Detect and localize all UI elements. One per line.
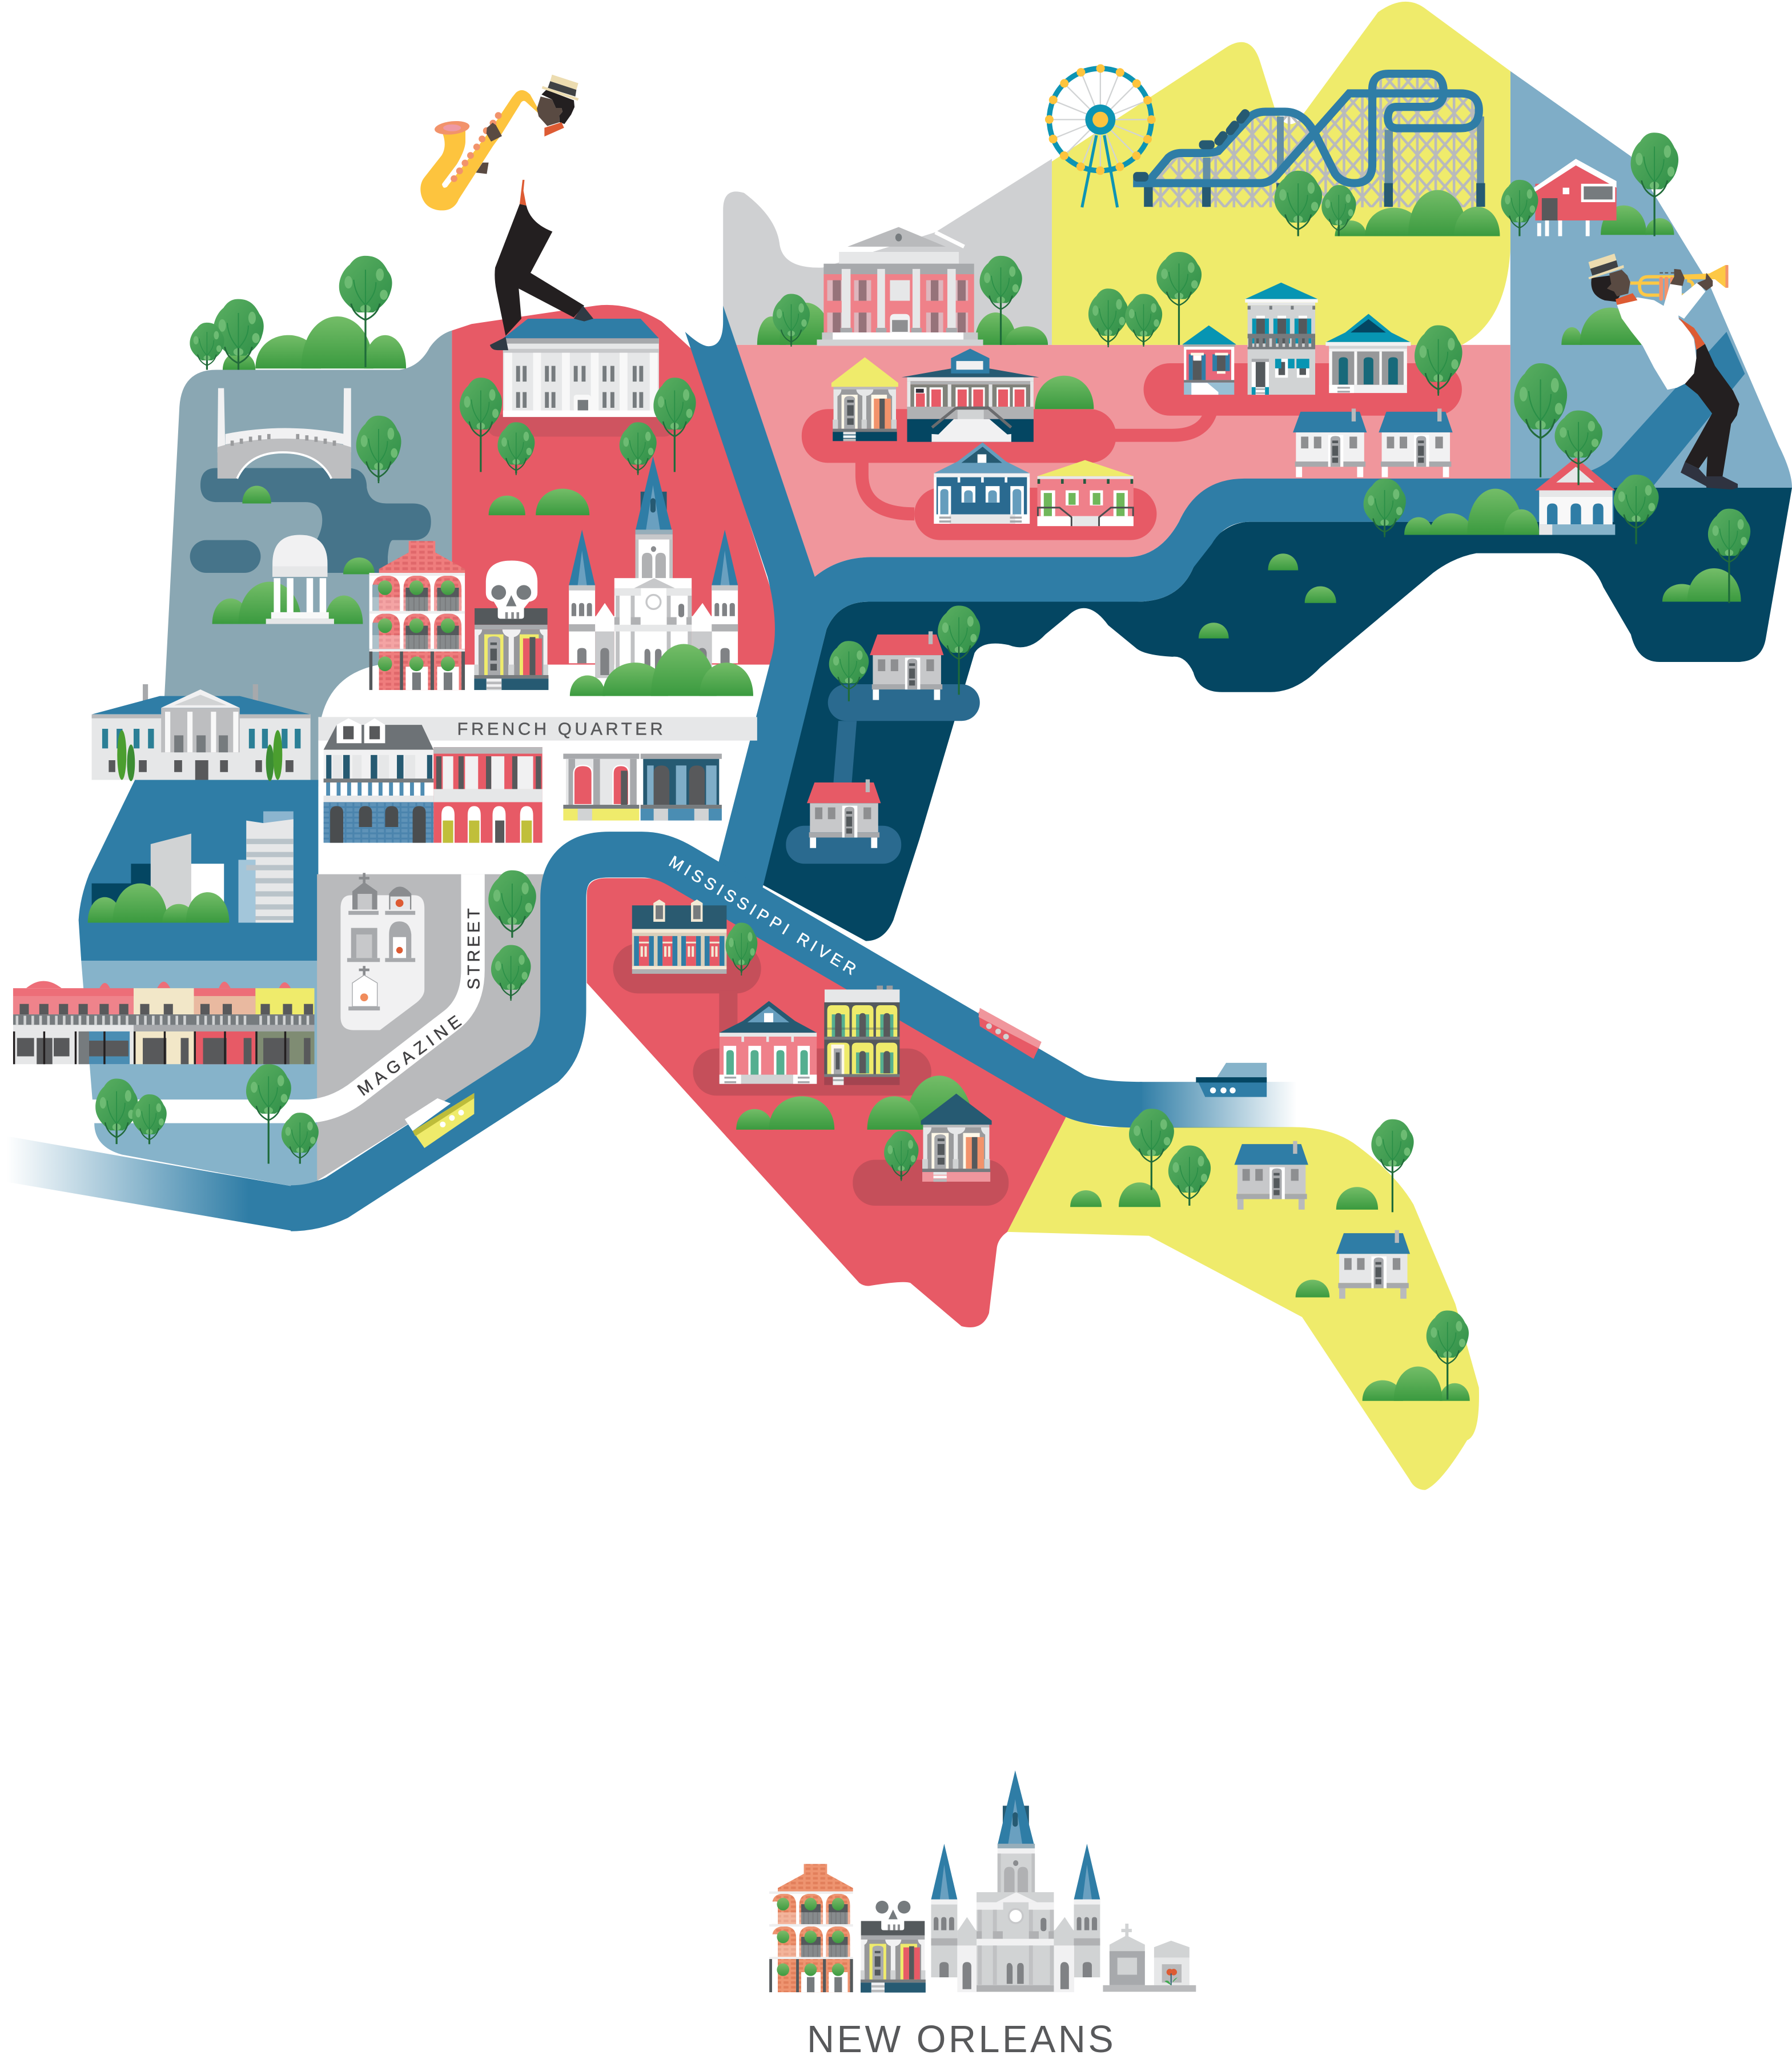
- building: brick townhouse: [769, 1864, 853, 1992]
- bush group: amusement park: [1335, 190, 1674, 345]
- bush: in front of cathedral: [570, 644, 753, 696]
- tree: [1321, 185, 1356, 236]
- tree: [1125, 294, 1162, 347]
- tree: [339, 256, 392, 367]
- land: west garden district blue block: [79, 780, 318, 961]
- building: yellow district cottage two: [1336, 1230, 1410, 1299]
- logo: New Orleans skyline: [769, 1771, 1196, 2055]
- tree: [1614, 475, 1659, 544]
- tree: [246, 1064, 291, 1164]
- buildings: garden district skyline: [88, 812, 294, 922]
- land: grey magazine street block: [317, 874, 545, 1181]
- building: lake cottage one: [870, 631, 943, 700]
- building: teal roof tall grey house: [1245, 283, 1318, 395]
- building: lake cottage two: [807, 780, 881, 848]
- building: French Quarter blue doors: [641, 754, 722, 821]
- building: teal roof red house: [1182, 326, 1236, 395]
- tree: [653, 378, 696, 472]
- label: Magazine: MAGAZINE: [354, 1012, 465, 1099]
- tree: [1631, 133, 1678, 236]
- building: grey hill courthouse: [817, 227, 983, 346]
- tree: [190, 323, 224, 370]
- tree: [491, 945, 531, 1001]
- boat: pink steamer: [979, 1008, 1042, 1059]
- building: pink yellow-roof house: [1038, 460, 1134, 526]
- icon: saxophone: [420, 90, 539, 210]
- land: south red district: [587, 878, 1067, 1327]
- tree: [829, 641, 869, 701]
- building: skull voodoo shop: [474, 560, 548, 690]
- tree: [1168, 1145, 1211, 1206]
- tree: [1129, 1109, 1174, 1190]
- tree: [1415, 325, 1462, 396]
- bush group: grey hill: [757, 303, 1094, 409]
- tree: [980, 256, 1022, 345]
- road: Magazine Street: [89, 874, 473, 1111]
- tree: [1275, 171, 1322, 236]
- building: bridge: [218, 388, 351, 479]
- building: blue brick townhouse: [324, 719, 433, 843]
- tree: [1554, 411, 1602, 485]
- building: gazebo: [266, 535, 334, 624]
- tree: [1427, 1310, 1469, 1399]
- road pills: pink district red streets: [802, 363, 1462, 540]
- land: yellow amusement district: [1052, 2, 1510, 345]
- land: grey hill district: [723, 159, 1052, 345]
- ride: ferris wheel: [1048, 67, 1153, 207]
- lake: dark navy water: [762, 488, 1792, 941]
- building: south navy roof townhouse: [632, 900, 726, 974]
- tree: [726, 922, 757, 976]
- boat: blue ferry: [1196, 1063, 1267, 1097]
- building: yellow district cottage one: [1235, 1141, 1308, 1210]
- building: skull house: [861, 1879, 926, 1993]
- tree: [282, 1113, 319, 1164]
- building: red stilt house: [1534, 159, 1617, 236]
- character: saxophone player: [420, 75, 593, 350]
- tree: [488, 870, 536, 938]
- building: red balcony townhouse: [433, 747, 543, 843]
- river: Mississippi River main channel: [291, 854, 1142, 1209]
- tree: [1708, 509, 1750, 603]
- bush group: south districts: [736, 1075, 1470, 1401]
- tree: [1088, 288, 1128, 347]
- bush group: mid city: [212, 485, 375, 624]
- bush group: top left: [223, 316, 406, 370]
- tree: [773, 294, 810, 347]
- building: white house with red roof: [1535, 457, 1615, 535]
- icon: trumpet: [1630, 265, 1729, 301]
- tree: [1156, 252, 1202, 345]
- tree: [620, 422, 657, 475]
- label: French Quarter: FRENCH QUARTER: [457, 719, 663, 738]
- ride: roller coaster: [1133, 74, 1485, 207]
- building: French Quarter red doors: [563, 754, 639, 821]
- tree: [460, 378, 502, 472]
- land: north red district: [452, 305, 780, 665]
- land: mid-city grey blue district: [160, 331, 452, 786]
- building: white cottage two: [1379, 408, 1453, 477]
- building: teal roof porch house: [1325, 314, 1411, 393]
- tree: [1514, 363, 1567, 477]
- river: west gradient fade: [0, 1135, 312, 1231]
- tree: [884, 1131, 918, 1181]
- label: Mississippi River: MISSISSIPPI RIVER: [666, 853, 859, 979]
- building: white cottage one: [1293, 408, 1367, 477]
- land: pink district: [736, 345, 1510, 577]
- tree: [214, 299, 264, 370]
- building: cathedral: [931, 1771, 1100, 1992]
- building: St. Louis Cathedral: [569, 456, 738, 678]
- building: yellow two storey house: [824, 986, 899, 1085]
- pond: lagoon: [190, 468, 431, 573]
- building: tombs: [1103, 1924, 1196, 1992]
- label: Street: STREET: [465, 908, 484, 989]
- land: steel blue east district: [1510, 71, 1792, 488]
- buildings: magazine street shops row: [13, 981, 315, 1064]
- river: east gradient fade: [1140, 1082, 1297, 1127]
- land: south yellow district: [1007, 1114, 1479, 1490]
- bush group: river bank and lake: [1199, 489, 1741, 639]
- building: brick townhouse with balconies: [369, 541, 465, 690]
- building: north courthouse: [503, 319, 659, 417]
- building: plantation mansion: [92, 684, 311, 781]
- tree: [938, 605, 980, 695]
- road pills: south district dark streets: [613, 944, 1008, 1206]
- tree: [1501, 180, 1538, 236]
- tree: [132, 1094, 167, 1144]
- building: pink porch house: [720, 1001, 817, 1084]
- canal: upper river branch: [685, 306, 1745, 889]
- character: trumpet player: [1589, 254, 1739, 489]
- tree: [356, 416, 401, 483]
- tree: [1371, 1119, 1414, 1212]
- tree: [497, 422, 535, 475]
- cemetery: Lafayette cemetery with tombs: [340, 873, 424, 1030]
- tree: [1364, 479, 1406, 537]
- land: west garden district light blue block: [81, 961, 318, 1186]
- building: blue double house: [934, 443, 1030, 524]
- building: blue mansion with staircase: [902, 349, 1039, 442]
- bush group: north red district: [489, 489, 589, 515]
- road pills: lake stilt houses: [786, 684, 980, 864]
- panel: French Quarter label strip: [318, 717, 757, 741]
- building: south navy roof shotgun house: [921, 1094, 992, 1182]
- boat: yellow ferry: [405, 1093, 474, 1148]
- building: yellow roof shotgun house: [831, 357, 898, 441]
- building: north courthouse shadow: [487, 414, 674, 436]
- tree: [95, 1078, 138, 1144]
